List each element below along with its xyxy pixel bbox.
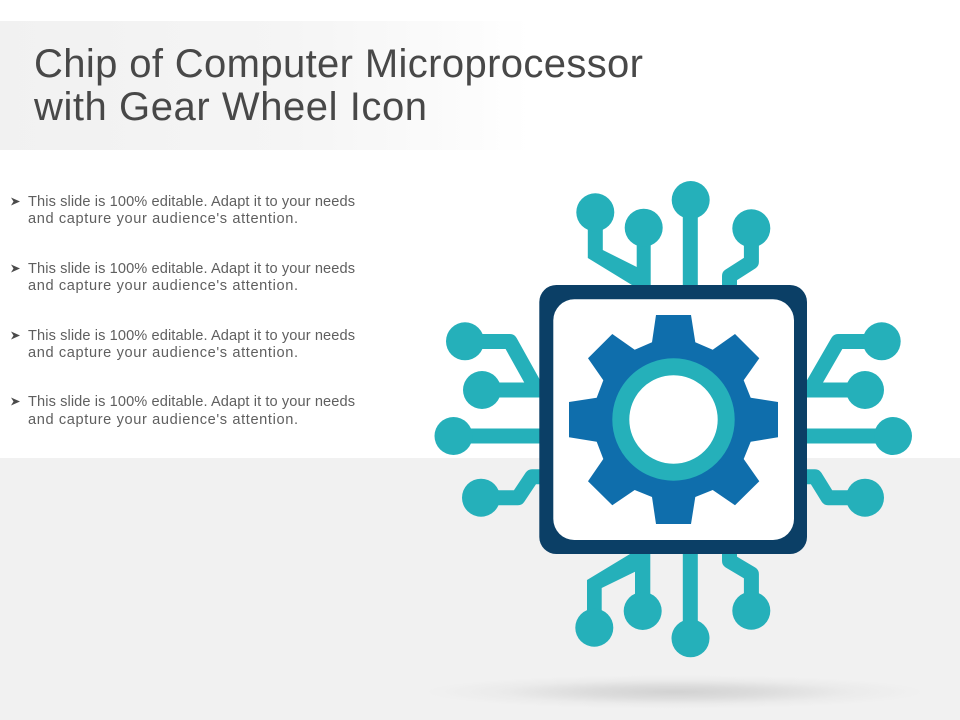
bullet 1: and capture your audience's attention. — [28, 211, 298, 227]
bullet 2: This slide is 100% editable. Adapt it to your needs — [28, 261, 355, 277]
bullet 3 — [11, 328, 355, 361]
bullet 2 — [11, 261, 355, 294]
circuit traces: top — [576, 181, 770, 290]
bullet 1: This slide is 100% editable. Adapt it to your needs — [28, 194, 355, 210]
bullet list — [11, 194, 355, 428]
bullet 4 — [11, 394, 355, 428]
circuit traces: left — [434, 322, 545, 517]
title: Chip of Computer Microprocessor — [34, 42, 643, 86]
bullet 2: and capture your audience's attention. — [28, 278, 298, 294]
bullet 4: This slide is 100% editable. Adapt it to your needs — [28, 394, 355, 410]
circuit traces: bottom — [575, 548, 770, 657]
bullet 3: This slide is 100% editable. Adapt it to your needs — [28, 328, 355, 344]
bullet 3: and capture your audience's attention. — [28, 345, 298, 361]
ground shadow — [425, 675, 925, 709]
gear hub ring — [621, 367, 726, 472]
title: with Gear Wheel Icon — [33, 85, 427, 129]
circuit traces: right — [800, 322, 912, 517]
icon: microprocessor chip with gear — [434, 181, 912, 657]
title band — [0, 21, 530, 150]
chip body — [539, 285, 807, 554]
chip inner panel — [553, 299, 794, 540]
gear wheel — [569, 315, 778, 524]
bullet 1 — [11, 194, 355, 227]
title — [33, 42, 643, 129]
bullet 4: and capture your audience's attention. — [28, 412, 298, 428]
lower grey background panel — [0, 458, 960, 720]
